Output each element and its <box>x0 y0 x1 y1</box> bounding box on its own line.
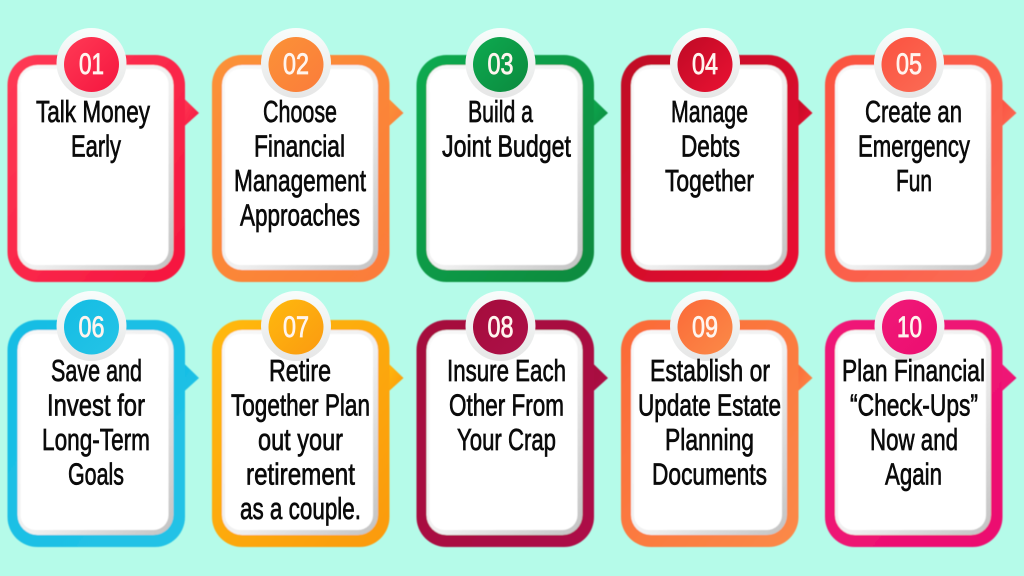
card frame 03 <box>416 55 608 282</box>
heading 01: Talk Money <box>36 94 150 129</box>
number badge 01: 01 <box>79 48 104 81</box>
heading 01: Early <box>71 128 121 164</box>
number badge 08: 08 <box>488 311 514 344</box>
panel: card 03 Build a Joint Budget <box>416 28 608 282</box>
number badge 08 <box>466 291 536 361</box>
card frame 10 <box>825 320 1016 547</box>
heading 10: “Check-Ups” <box>850 388 978 422</box>
number badge 02: 02 <box>283 48 309 81</box>
heading 05: Emergency <box>858 128 970 164</box>
panel: card 02 Choose Financial Management Approaches <box>212 28 404 282</box>
number badge 05: 05 <box>896 48 922 81</box>
card frame 05 <box>825 55 1016 282</box>
heading 02: Financial <box>254 128 345 164</box>
heading 06: Invest for <box>47 388 145 422</box>
panel: card 08 Insure Each Other <box>416 291 608 547</box>
heading 07: out your <box>258 422 343 457</box>
heading 09: Update Estate <box>638 388 781 422</box>
heading 10: Now and <box>870 422 958 457</box>
heading 04: Debts <box>681 128 740 164</box>
number badge 03: 03 <box>488 48 514 81</box>
number badge 07: 07 <box>283 311 309 344</box>
heading 03: Joint Budget <box>442 128 571 164</box>
heading 05 <box>858 94 970 198</box>
heading 09: Documents <box>652 456 767 492</box>
heading 02: Management <box>234 163 366 198</box>
heading 05: Create an <box>865 94 962 129</box>
heading 04: Together <box>665 163 754 198</box>
heading 10 <box>842 353 985 492</box>
heading 09 <box>638 353 781 492</box>
panel: card 04 Manage Debts Together <box>621 28 812 282</box>
heading 07: as a couple. <box>240 491 361 526</box>
heading 06: Long-Term <box>42 422 150 457</box>
card frame 06 <box>8 320 199 547</box>
heading 09: Planning <box>665 422 754 457</box>
number badge 06: 06 <box>78 311 104 344</box>
heading 03: Build a <box>468 94 534 129</box>
heading 07: Together Plan <box>231 388 370 422</box>
panel: card 06 Save and Invest for Long-Term Goals <box>8 291 199 547</box>
number badge 10: 10 <box>897 311 922 344</box>
heading 10: Again <box>885 456 942 492</box>
heading 02: Choose <box>263 94 337 129</box>
heading 06: Save and <box>51 353 142 388</box>
heading 03 <box>442 94 571 164</box>
number badge 06 <box>56 291 126 361</box>
card frame 01 <box>8 55 199 282</box>
heading 04 <box>665 94 754 198</box>
heading 08: Your Crap <box>457 422 556 457</box>
panel: card 09 Estate Planning Documents <box>621 291 812 547</box>
heading 01 <box>36 94 150 164</box>
card frame 07 <box>212 320 404 547</box>
heading 02 <box>234 94 366 232</box>
card frame 09 <box>621 320 812 547</box>
number badge 10 <box>874 291 944 361</box>
heading 08: Insure Each <box>447 353 566 388</box>
panel: card 05 Create an Emergency Fun <box>825 28 1016 282</box>
heading 04: Manage <box>671 94 748 129</box>
heading 06: Goals <box>68 456 124 492</box>
heading 02: Approaches <box>240 198 360 232</box>
card frame 02 <box>212 55 404 282</box>
heading 07: retirement <box>246 456 355 492</box>
panel: card 01 Talk Money Early <box>8 28 199 282</box>
number badge 07 <box>261 291 331 361</box>
heading 07 <box>231 353 370 526</box>
heading 08 <box>447 353 566 457</box>
heading 05: Fun <box>896 163 932 198</box>
number badge 04: 04 <box>692 48 718 81</box>
number badge 05 <box>874 28 944 98</box>
number badge 09 <box>670 291 740 361</box>
card frame 04 <box>621 55 812 282</box>
heading 06 <box>42 353 150 492</box>
heading 09: Establish or <box>650 353 770 388</box>
panel: card 07 Retire Together <box>212 291 404 547</box>
card frame 08 <box>416 320 608 547</box>
heading 08: Other From <box>449 388 564 422</box>
heading 07: Retire <box>269 353 331 388</box>
number badge 01 <box>56 28 126 98</box>
number badge 02 <box>261 28 331 98</box>
number badge 09: 09 <box>692 311 718 344</box>
number badge 04 <box>670 28 740 98</box>
number badge 03 <box>466 28 536 98</box>
panel: card 10 Plan Financial Check-Ups <box>825 291 1016 547</box>
